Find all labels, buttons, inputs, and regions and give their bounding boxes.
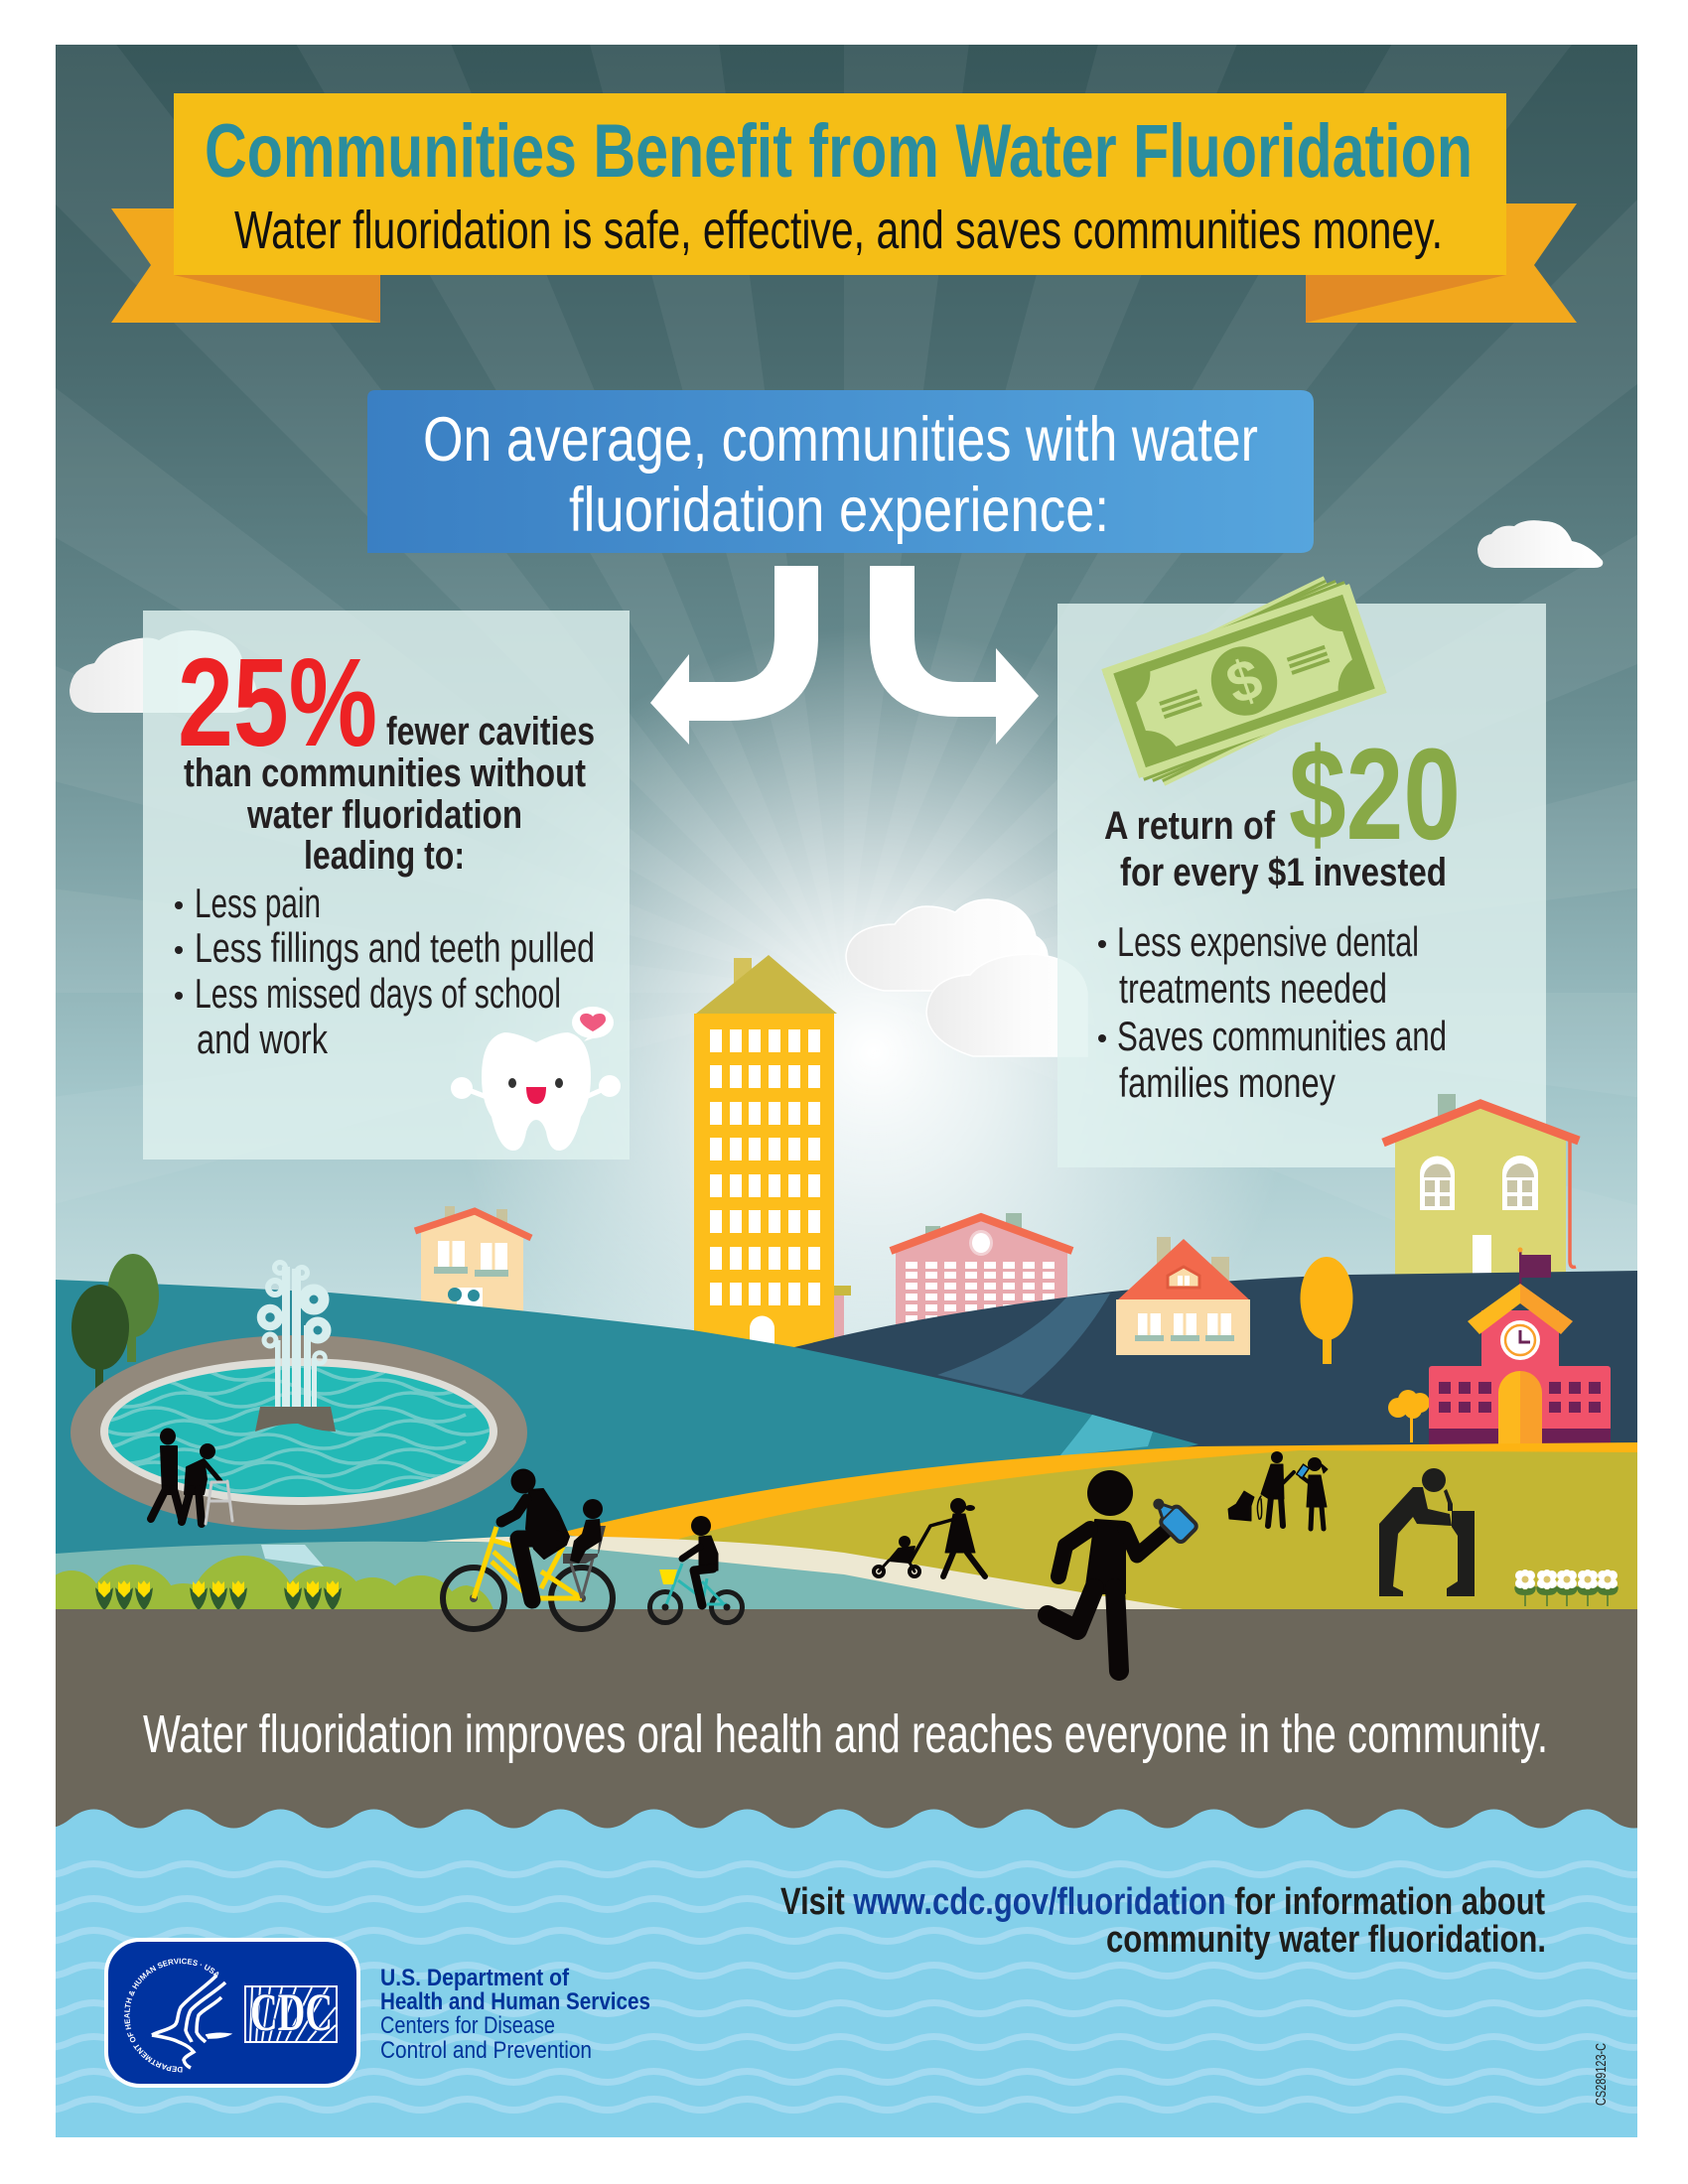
road band — [56, 1609, 1637, 1833]
stat: $20: $20 — [1289, 721, 1461, 867]
agency name — [380, 1965, 650, 2064]
stat description — [184, 710, 595, 878]
water jets — [275, 1267, 317, 1407]
white flowers — [1515, 1570, 1618, 1606]
stat: 25%: 25% — [178, 632, 377, 772]
icon: water bottle — [1146, 1491, 1198, 1544]
olive field — [679, 1450, 1638, 1618]
blue heading box — [367, 390, 1314, 553]
bullet list: Saves communities and — [1117, 1013, 1447, 1059]
bushes — [42, 1556, 493, 1663]
stat description: fewer cavities — [386, 710, 595, 753]
person at drinking fountain — [1379, 1468, 1475, 1596]
bullet list — [175, 880, 595, 1062]
arrow: left — [650, 566, 818, 745]
agency name: U.S. Department of — [380, 1965, 570, 1991]
light teal land — [56, 1542, 1053, 1613]
blue heading box: fluoridation experience: — [569, 476, 1109, 545]
bicycle with adult and child — [443, 1469, 613, 1629]
hill: navy — [794, 1271, 1637, 1447]
bullet list: Less fillings and teeth pulled — [195, 924, 595, 971]
water band — [24, 1809, 1657, 2144]
agency name: Health and Human Services — [380, 1988, 650, 2015]
bullet list: and work — [197, 1016, 329, 1062]
blue heading box: On average, communities with water — [423, 405, 1258, 475]
panel: fewer cavities — [143, 611, 630, 1160]
orange road — [556, 1442, 1638, 1549]
woman with stroller — [874, 1498, 985, 1576]
stat description: water fluoridation — [246, 793, 522, 837]
bullet list: treatments needed — [1119, 965, 1387, 1012]
website call to action — [780, 1881, 1546, 1961]
child on small bicycle — [649, 1516, 743, 1622]
icon: stack of dollar bills — [1101, 576, 1387, 786]
tulips — [96, 1580, 341, 1609]
bullet list: Less expensive dental — [1117, 918, 1419, 965]
adult rider — [501, 1469, 569, 1600]
school with clock tower — [1388, 1247, 1611, 1444]
CDC mark: CDC — [250, 1982, 333, 2042]
people: couple with walker — [151, 1428, 232, 1524]
stream — [261, 1545, 324, 1567]
bullet list: families money — [1119, 1059, 1336, 1106]
fountain — [70, 1263, 527, 1530]
tree beside school — [1388, 1390, 1430, 1442]
cream path — [426, 1536, 1206, 1613]
stat description: than communities without — [184, 751, 586, 795]
child on rear seat — [563, 1499, 606, 1564]
sky background with sun rays — [56, 45, 1637, 1335]
bullet list — [1098, 918, 1447, 1106]
tree: orange — [1301, 1257, 1352, 1364]
small pink building behind tower — [834, 1286, 851, 1338]
water curls — [261, 1263, 327, 1364]
publication code: CS289123-C — [1593, 2043, 1610, 2106]
stat description: leading to: — [304, 834, 465, 878]
HHS eagle seal: DEPARTMENT OF HEALTH & HUMAN SERVICES · USA — [124, 1958, 218, 2073]
stat description — [1104, 804, 1447, 894]
house: middle — [1116, 1237, 1250, 1355]
icon: stack of dollar bills: $ — [1218, 645, 1270, 717]
ribbon tails — [111, 204, 1577, 323]
website call to action: Visit www.cdc.gov/fluoridation for information about — [780, 1881, 1545, 1923]
panel: return on investment — [1057, 576, 1546, 1167]
hill: teal — [56, 1280, 1198, 1559]
logo: HHS and CDC — [104, 1938, 360, 2088]
agency name: Centers for Disease — [380, 2012, 555, 2039]
icon: smiling tooth — [451, 1007, 621, 1151]
house: large yellow — [1383, 1094, 1579, 1281]
swoosh on teal hill — [1059, 1415, 1153, 1456]
house: left peach — [415, 1206, 531, 1315]
pink building — [890, 1213, 1074, 1324]
trees: left — [71, 1254, 159, 1390]
tower — [694, 955, 837, 1351]
website call to action: community water fluoridation. — [1106, 1919, 1546, 1961]
clouds — [70, 520, 1603, 1056]
arrow: right — [870, 566, 1039, 745]
title banner — [111, 93, 1577, 323]
runner with water bottle — [1048, 1470, 1198, 1671]
stat description: for every $1 invested — [1120, 851, 1447, 894]
flag — [1517, 1247, 1551, 1285]
bullet list: Less missed days of school — [195, 970, 561, 1017]
clock — [1500, 1320, 1540, 1360]
agency name: Control and Prevention — [380, 2037, 592, 2064]
swoosh on navy hill — [937, 1294, 1110, 1395]
bullet list: Less pain — [195, 880, 321, 926]
stat description: A return of — [1104, 804, 1276, 848]
couple with dog and phone — [1228, 1451, 1328, 1529]
